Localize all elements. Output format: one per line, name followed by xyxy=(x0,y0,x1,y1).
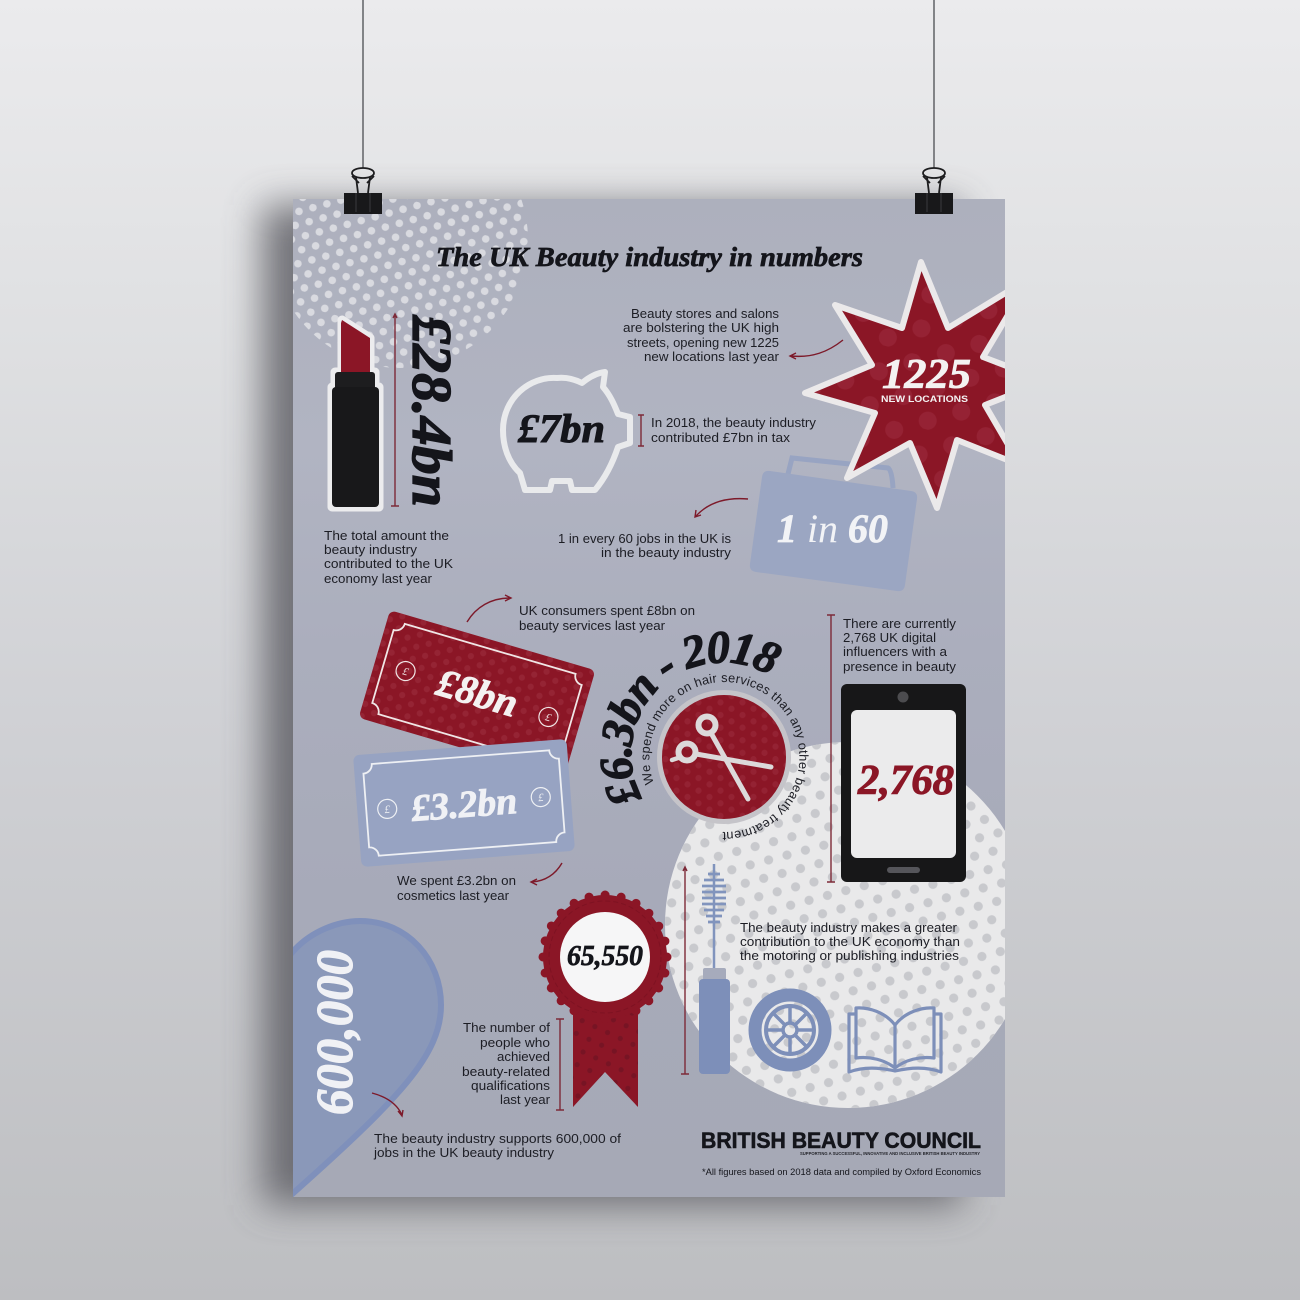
arrow: to jobs supported text xyxy=(372,1093,403,1116)
footnote: *All figures based on 2018 data and compiled by Oxford Economics xyxy=(702,1167,982,1177)
ticket: red £8bn xyxy=(360,612,594,764)
hanging wires xyxy=(363,0,934,168)
text: total amount: economy last year xyxy=(324,572,433,586)
text: beauty stores: new locations last year xyxy=(644,350,780,364)
heart half: 600,000 xyxy=(290,921,441,1196)
text: tax: contributed £7bn in tax xyxy=(651,431,791,445)
poster xyxy=(293,199,1005,1197)
text: jobs xyxy=(558,532,732,560)
text: qualifications: The number of xyxy=(463,1021,550,1035)
arrow: to cosmetics text xyxy=(531,863,562,885)
text: greater contribution xyxy=(740,921,960,963)
text: beauty stores xyxy=(623,307,780,364)
text: greater contribution: The beauty industry makes a greater xyxy=(740,921,958,935)
icon: scissors xyxy=(657,690,791,824)
text: cosmetics xyxy=(397,874,516,903)
measure line: mascara xyxy=(681,867,689,1074)
title: The UK Beauty industry in numbers xyxy=(436,242,863,272)
text: cosmetics: cosmetics last year xyxy=(397,889,510,903)
measure line: tax xyxy=(638,415,644,446)
text: influencers: There are currently xyxy=(843,617,957,631)
stat: 600,000: 600,000 xyxy=(307,950,364,1115)
icon: rosette xyxy=(543,895,667,1107)
icon: lipstick xyxy=(332,320,379,507)
stat: 2,768: 2,768 xyxy=(857,758,954,804)
arrow: to jobs text xyxy=(695,499,748,517)
stat: 1 in 60: 1 in 60 xyxy=(777,506,888,551)
icon: wheel xyxy=(755,995,825,1065)
text: total amount: beauty industry xyxy=(324,543,418,557)
measure line: lipstick xyxy=(391,314,399,506)
binder clip right xyxy=(915,168,953,214)
text: total amount: The total amount the xyxy=(324,529,449,543)
curved text: hair services: We spend more on hair services than any other beauty treatment xyxy=(642,674,809,840)
ticket: blue £3.2bn xyxy=(353,739,575,867)
text: qualifications: achieved xyxy=(497,1050,550,1064)
ticket: red £8bn: £8bn xyxy=(431,659,523,726)
text: total amount: contributed to the UK xyxy=(324,557,454,571)
ticket: blue £3.2bn: £ xyxy=(538,792,545,804)
dotted circle bottom right xyxy=(665,742,1031,1108)
text: beauty stores: are bolstering the UK high xyxy=(623,321,779,335)
text: jobs supported: jobs in the UK beauty industry xyxy=(373,1146,555,1160)
stat: 65,550: 65,550 xyxy=(567,941,643,972)
icon: mascara xyxy=(699,864,730,1074)
icon: phone xyxy=(841,684,966,882)
text: jobs supported xyxy=(373,1132,622,1160)
text: influencers: 2,768 UK digital xyxy=(843,631,936,645)
text: services: UK consumers spent £8bn on xyxy=(519,604,695,618)
text: qualifications xyxy=(462,1021,551,1107)
ticket: red £8bn: £ xyxy=(401,665,410,679)
icon: piggy bank xyxy=(503,372,630,490)
poster shadow xyxy=(262,205,962,1205)
text: qualifications: last year xyxy=(500,1093,551,1107)
ticket: blue £3.2bn: £ xyxy=(384,804,391,816)
text: tax xyxy=(652,418,816,442)
arrow: to stores text xyxy=(790,340,843,359)
dotted circle top left xyxy=(293,199,528,368)
text: jobs: in the beauty industry xyxy=(601,546,732,560)
icon: starburst xyxy=(802,259,1005,511)
text: greater contribution: the motoring or publishing industries xyxy=(740,949,959,963)
stat: £28.4bn: £28.4bn xyxy=(400,314,462,507)
text: services xyxy=(519,604,695,633)
icon: open book xyxy=(849,1008,941,1072)
text: influencers: influencers with a xyxy=(843,645,948,659)
logo: British Beauty Council: BRITISH BEAUTY COUNCIL xyxy=(701,1128,981,1153)
text: qualifications: qualifications xyxy=(471,1079,550,1093)
binder clip left xyxy=(344,168,382,214)
icon: briefcase xyxy=(750,458,917,591)
logo tagline: SUPPORTING A SUCCESSFUL, INNOVATIVE AND INCLUSIVE BRITISH BEAUTY INDUSTRY xyxy=(800,1151,980,1156)
ticket: blue £3.2bn: £3.2bn xyxy=(409,780,519,830)
stat: £7bn: £7bn xyxy=(517,406,605,451)
text: tax: In 2018, the beauty industry xyxy=(651,416,817,430)
measure line: influencers xyxy=(827,615,835,882)
text: cosmetics: We spent £3.2bn on xyxy=(397,874,516,888)
measure line: qualifications xyxy=(556,1019,564,1110)
ticket: red £8bn: £ xyxy=(544,711,553,725)
text: beauty stores: Beauty stores and salons xyxy=(631,307,779,321)
text: jobs supported: The beauty industry supports 600,000 of xyxy=(374,1132,622,1146)
text: influencers: presence in beauty xyxy=(843,660,957,674)
label: new locations: NEW LOCATIONS xyxy=(881,394,968,405)
curved stat: £6.3bn - 2018: £6.3bn - 2018 xyxy=(600,631,782,804)
text: qualifications: people who xyxy=(480,1036,550,1050)
text: services: beauty services last year xyxy=(519,619,666,633)
text: qualifications: beauty-related xyxy=(462,1065,550,1079)
stat: 1225: 1225 xyxy=(882,352,971,398)
text: total amount xyxy=(324,529,454,586)
text: influencers xyxy=(843,617,957,674)
text: jobs: 1 in every 60 jobs in the UK is xyxy=(558,532,731,546)
text: greater contribution: contribution to the UK economy than xyxy=(740,935,960,949)
arrow: to services text xyxy=(467,595,511,622)
text: beauty stores: streets, opening new 1225 xyxy=(627,336,779,350)
